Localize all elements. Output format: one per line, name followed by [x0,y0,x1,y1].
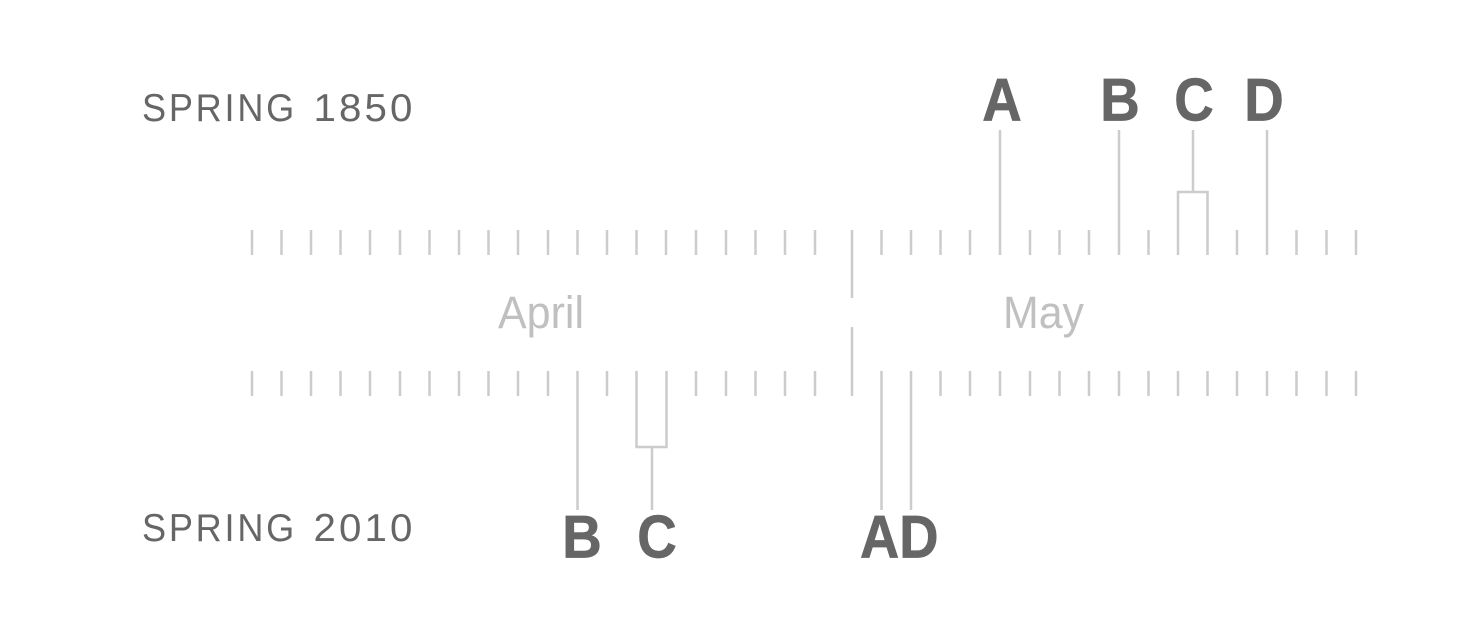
heading: spring 1850: 1850 [314,87,416,130]
heading: spring 2010: 2010 [314,507,416,550]
1850 marker A: A [982,66,1022,134]
2010 markers A and D [860,371,938,570]
1850 marker D: D [1244,66,1284,134]
heading: spring 2010: SPRING [142,507,297,550]
bottom tick scale [252,371,1356,396]
1850 marker C with range bracket: C [1174,66,1214,134]
month divider [851,230,853,396]
heading: spring 1850: SPRING [142,87,297,130]
heading: spring 1850 [142,87,416,130]
2010 marker B: B [562,504,602,570]
1850 marker C with range bracket [1174,66,1214,255]
month label: April: April [498,287,584,338]
1850 marker B: B [1100,66,1140,134]
2010 marker C with range bracket: C [637,504,677,570]
heading: spring 2010 [142,507,416,550]
top tick scale [252,230,1356,255]
2010 marker C with range bracket [636,371,677,570]
month label: May: May [1003,287,1084,338]
2010 markers A and D: AD [860,504,938,570]
